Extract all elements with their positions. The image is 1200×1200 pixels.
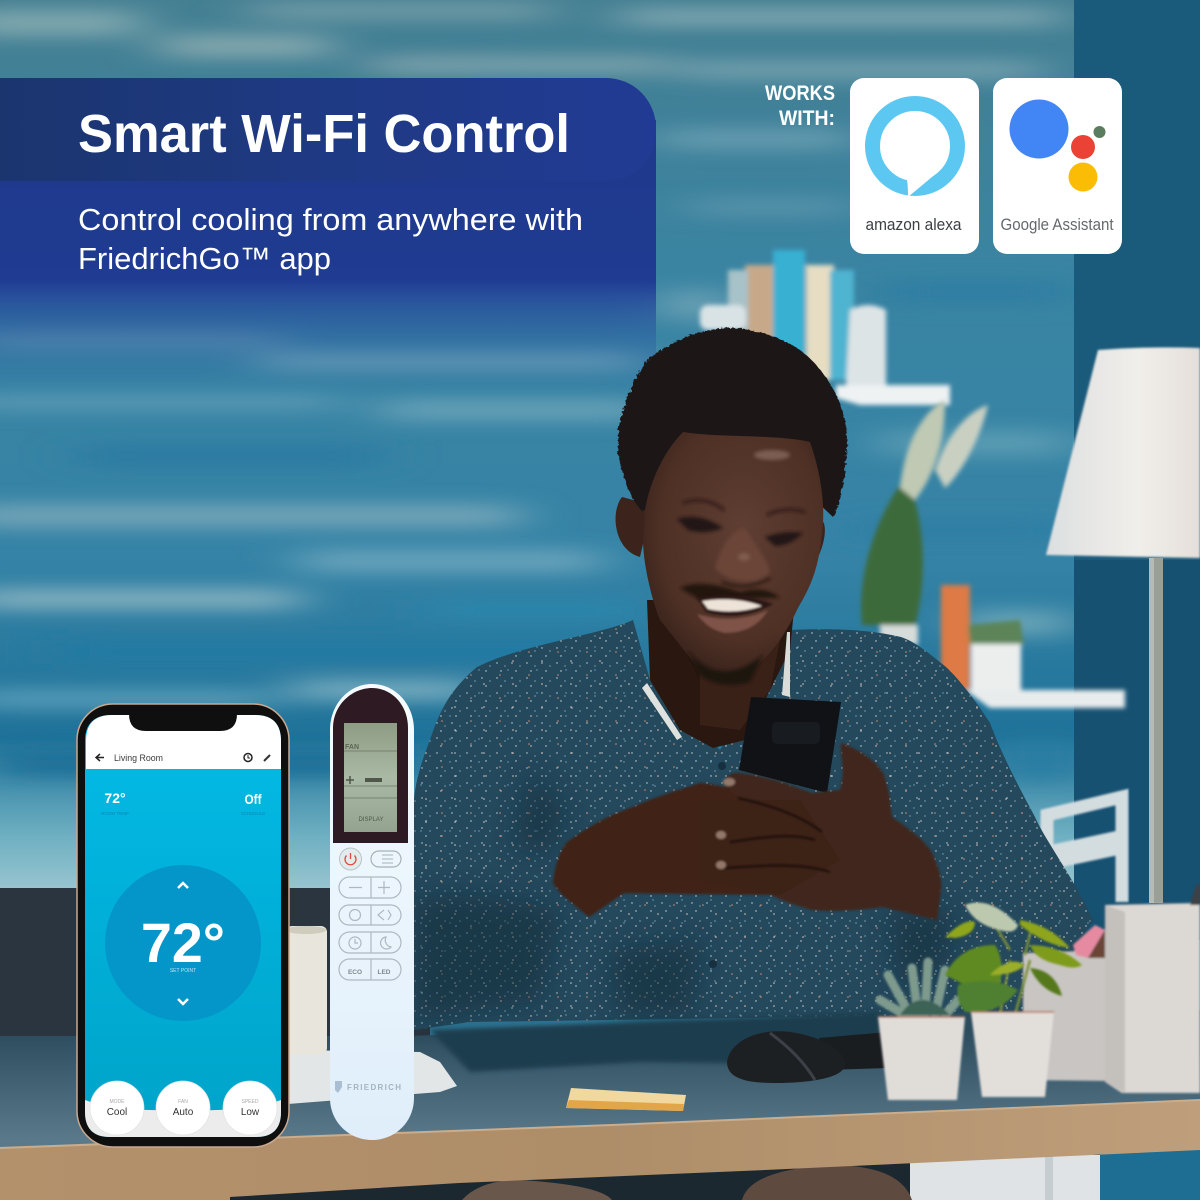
works with label: WORKS	[765, 82, 835, 105]
temperature dial	[105, 865, 261, 1021]
speed button	[223, 1081, 277, 1135]
blue heading panel with fade	[0, 120, 656, 410]
background: dark lower wall band	[0, 888, 430, 1048]
fan swing button	[339, 905, 401, 925]
shirt	[414, 620, 1093, 1030]
room temp readout: 72°	[104, 790, 126, 806]
potted leafy plant	[945, 902, 1082, 1097]
eco led button	[339, 959, 401, 980]
potted succulent	[878, 962, 965, 1100]
mode button	[90, 1081, 144, 1135]
sticky note	[566, 1088, 686, 1111]
display housing	[333, 688, 408, 843]
app header	[96, 753, 270, 763]
room temp readout	[101, 790, 129, 816]
power button	[340, 848, 362, 870]
eyes and brows	[677, 500, 805, 546]
background: dark right wall section	[1074, 0, 1200, 940]
shirt fold shadows	[414, 770, 950, 1020]
title: Smart Wi-Fi Control	[78, 104, 570, 164]
works with label: WITH:	[779, 107, 835, 130]
mode button: MODE	[110, 1099, 125, 1105]
lower shelf with orange book and pot	[941, 585, 1125, 708]
schedule readout	[241, 791, 265, 816]
floor and legs under desk	[0, 1140, 1200, 1200]
timer sleep button	[339, 932, 401, 953]
right ear	[812, 520, 825, 562]
smile	[697, 595, 773, 633]
heading bar	[0, 78, 656, 181]
smartphone with app	[77, 704, 289, 1147]
card: google assistant	[993, 78, 1122, 254]
white chair back	[1047, 797, 1122, 905]
app header: Living Room	[114, 753, 163, 763]
floor lamp	[1046, 347, 1200, 903]
minus plus button	[339, 877, 401, 898]
fan button: FAN	[178, 1099, 188, 1105]
mode button: Cool	[107, 1107, 127, 1118]
coffee cup	[286, 926, 327, 1054]
background: blurred blue painted wall	[0, 0, 1200, 900]
friedrich logo: FRIEDRICH	[347, 1083, 401, 1092]
lcd	[344, 723, 397, 832]
holder box on right	[1023, 885, 1200, 1093]
face	[643, 432, 823, 685]
google assistant label: Google Assistant	[1000, 215, 1114, 234]
shelf with books	[700, 250, 950, 405]
remote control	[330, 684, 414, 1140]
fan button: Auto	[173, 1107, 194, 1118]
friedrich logo	[335, 1081, 401, 1093]
man	[414, 328, 1093, 1030]
schedule readout: SCHEDULE	[241, 811, 265, 816]
eco led button: ECO	[348, 969, 362, 976]
hair	[618, 328, 847, 517]
computer mouse and keyboard	[727, 1031, 888, 1083]
speed button: SPEED	[242, 1099, 259, 1105]
desk	[0, 1006, 1200, 1200]
hands	[553, 743, 941, 920]
paper stack under devices	[288, 1050, 457, 1104]
app screen	[85, 715, 281, 1137]
subtitle	[78, 202, 583, 276]
lcd: FAN	[345, 744, 359, 751]
schedule readout: Off	[244, 791, 262, 807]
temperature dial: SET POINT	[170, 968, 196, 974]
icon: alexa ring	[872, 104, 958, 197]
alexa label: amazon alexa	[866, 215, 962, 234]
desk shadow under man	[430, 1012, 880, 1072]
neck and collar	[642, 600, 795, 748]
fingernails	[716, 778, 735, 869]
eco led button: LED	[378, 969, 391, 976]
icon: assistant dots	[1010, 100, 1106, 192]
menu button	[371, 851, 401, 867]
nose	[715, 528, 770, 586]
moustache and beard	[680, 584, 780, 685]
smartphone held	[739, 697, 841, 793]
temperature dial: 72°	[141, 911, 225, 974]
subtitle: Control cooling from anywhere with	[78, 202, 583, 237]
room temp readout: ROOM TEMP	[101, 811, 129, 816]
card: amazon alexa	[850, 78, 979, 254]
left ear	[616, 497, 652, 557]
lcd: DISPLAY	[359, 817, 383, 823]
subtitle: FriedrichGo™ app	[78, 241, 331, 276]
speed button: Low	[241, 1107, 260, 1118]
finger creases	[724, 798, 830, 872]
fan button	[156, 1081, 210, 1135]
notch	[129, 714, 237, 731]
forehead highlight	[754, 450, 790, 460]
leafy plant on shelf	[861, 400, 988, 645]
works with label	[765, 82, 835, 130]
